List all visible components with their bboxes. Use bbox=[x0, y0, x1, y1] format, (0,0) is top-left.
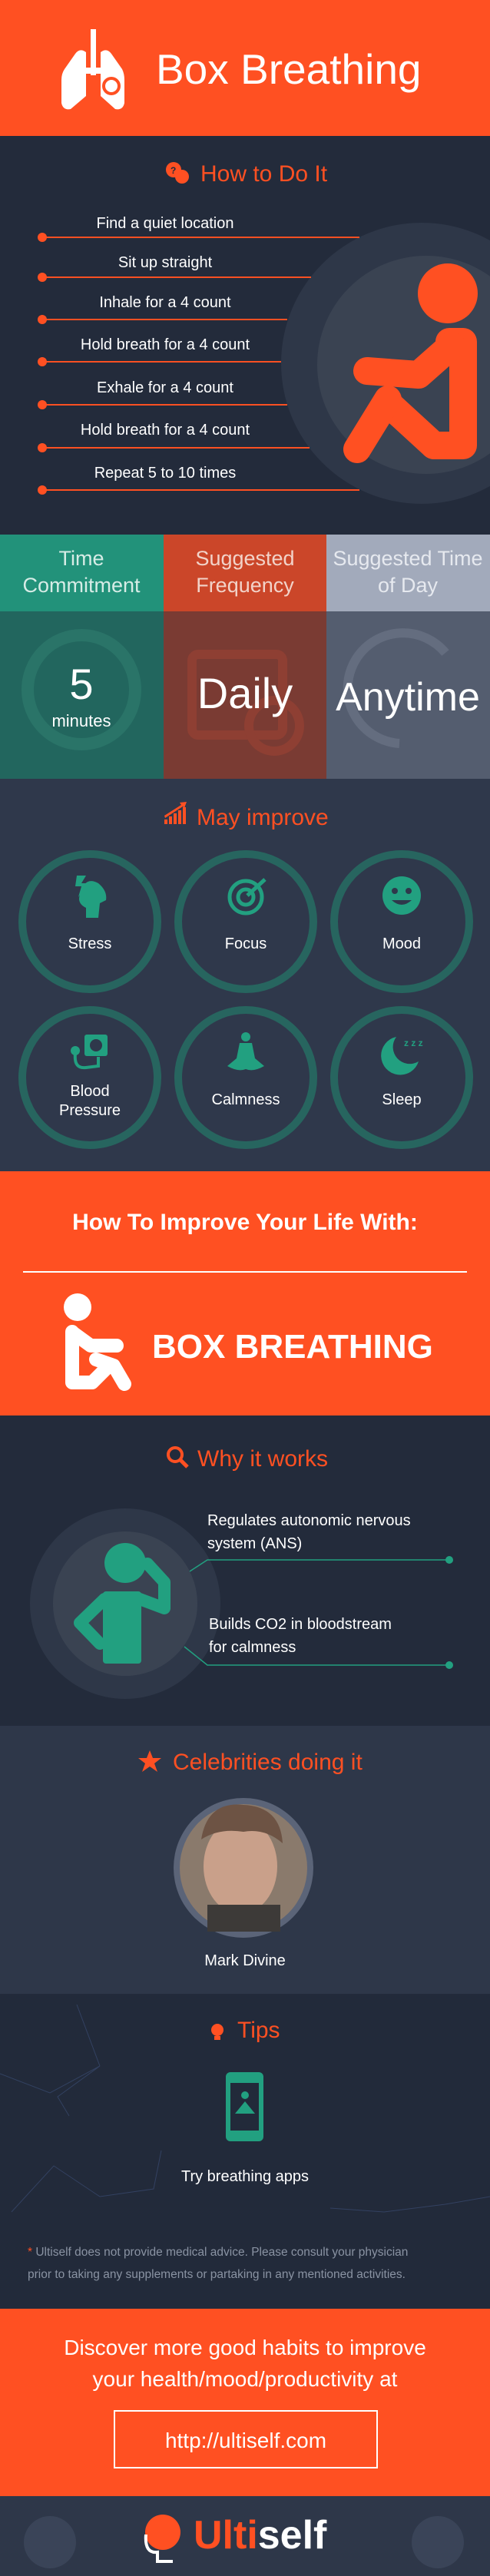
heading: how to do it: How to Do It bbox=[200, 161, 328, 187]
panel: may improve: Calmness bbox=[212, 1091, 280, 1108]
icon: lungs bbox=[61, 29, 124, 109]
icon: sitting figure white bbox=[64, 1293, 124, 1384]
icon: phone bbox=[226, 2072, 263, 2141]
text: reasons: Builds CO2 in bloodstream bbox=[209, 1616, 392, 1633]
panel: tips: Try breathing apps bbox=[181, 2168, 309, 2185]
heading: celebrities: Celebrities doing it bbox=[173, 1750, 363, 1775]
panel: suggested frequency bbox=[164, 535, 326, 779]
panel: time commitment: Commitment bbox=[22, 574, 141, 597]
icon: stress bbox=[75, 876, 106, 918]
panel: suggested frequency: Suggested bbox=[195, 547, 295, 570]
panel: suggested frequency: Daily bbox=[197, 669, 293, 717]
footer logo: Ultiself bbox=[194, 2513, 327, 2558]
steps list: Repeat 5 to 10 times bbox=[94, 465, 236, 482]
steps list: Exhale for a 4 count bbox=[97, 379, 233, 396]
panel: suggested time of day bbox=[326, 535, 490, 779]
footer call to action: http://ultiself.com bbox=[165, 2429, 326, 2452]
icon: focus bbox=[230, 879, 265, 913]
text: reasons: system (ANS) bbox=[207, 1535, 302, 1552]
panel: why it works bbox=[0, 1415, 490, 1726]
title: Box Breathing bbox=[156, 45, 421, 93]
panel: celebrities bbox=[0, 1726, 490, 1994]
disclaimer bbox=[28, 2246, 408, 2281]
banner: how to improve your life: How To Improve Your Life With: bbox=[72, 1210, 418, 1235]
steps list: Hold breath for a 4 count bbox=[81, 422, 250, 439]
panel: celebrities: Mark Divine bbox=[204, 1952, 286, 1969]
disclaimer: prior to taking any supplements or partaking in any mentioned activities. bbox=[28, 2268, 406, 2281]
panel: may improve: Mood bbox=[382, 935, 421, 952]
banner: how to improve your life bbox=[0, 1171, 490, 1415]
heading: how to do it: ? bbox=[171, 165, 176, 176]
icon: sleep: z z z bbox=[404, 1038, 423, 1048]
panel: may improve: Blood bbox=[70, 1083, 110, 1100]
icon: calmness bbox=[227, 1032, 264, 1070]
footer call to action: your health/mood/productivity at bbox=[93, 2367, 398, 2391]
panel: how to do it bbox=[0, 136, 490, 535]
text: reasons bbox=[184, 1512, 453, 1669]
panel: suggested frequency: Frequency bbox=[196, 574, 294, 597]
photo: Mark Divine bbox=[174, 1798, 313, 1938]
panel: time commitment: 5 bbox=[69, 660, 94, 708]
panel: may improve: Focus bbox=[225, 935, 267, 952]
heading: may improve: May improve bbox=[197, 805, 329, 830]
panel: suggested time of day: of Day bbox=[378, 574, 439, 597]
footer call to action: Discover more good habits to improve bbox=[64, 2336, 426, 2359]
footer logo bbox=[0, 2496, 490, 2576]
header banner bbox=[0, 0, 490, 136]
panel: may improve: Sleep bbox=[382, 1091, 422, 1108]
panel: time commitment bbox=[0, 535, 164, 779]
text: reasons: for calmness bbox=[209, 1639, 296, 1656]
circle with thinking figure bbox=[30, 1508, 220, 1699]
heading: tips: Tips bbox=[237, 2018, 280, 2043]
text: reasons: Regulates autonomic nervous bbox=[207, 1512, 411, 1529]
panel: suggested time of day: Suggested Time bbox=[333, 547, 483, 570]
panel: may improve: Pressure bbox=[59, 1102, 121, 1119]
banner: how to improve your life: BOX BREATHING bbox=[152, 1328, 433, 1366]
big circle with sitting figure bbox=[281, 223, 490, 504]
panel: tips bbox=[0, 1994, 490, 2309]
steps list: Inhale for a 4 count bbox=[99, 294, 231, 311]
steps list: Find a quiet location bbox=[96, 215, 234, 232]
panel: may improve bbox=[0, 779, 490, 1171]
panel: suggested time of day: Anytime bbox=[336, 675, 480, 720]
steps list bbox=[38, 215, 359, 495]
panel: time commitment: minutes bbox=[51, 711, 111, 730]
icon: blood pressure bbox=[71, 1035, 108, 1068]
panel: time commitment: Time bbox=[58, 547, 104, 570]
steps list: Sit up straight bbox=[118, 254, 213, 271]
heading: why it works: Why it works bbox=[197, 1446, 328, 1472]
disclaimer: * Ultiself does not provide medical advice. Please consult your physician bbox=[28, 2246, 408, 2259]
steps list: Hold breath for a 4 count bbox=[81, 336, 250, 353]
heading: tips bbox=[211, 2018, 280, 2043]
icon: mood bbox=[382, 876, 421, 915]
icon: sleep bbox=[381, 1037, 423, 1074]
panel: may improve: Stress bbox=[68, 935, 111, 952]
footer call to action bbox=[0, 2309, 490, 2496]
